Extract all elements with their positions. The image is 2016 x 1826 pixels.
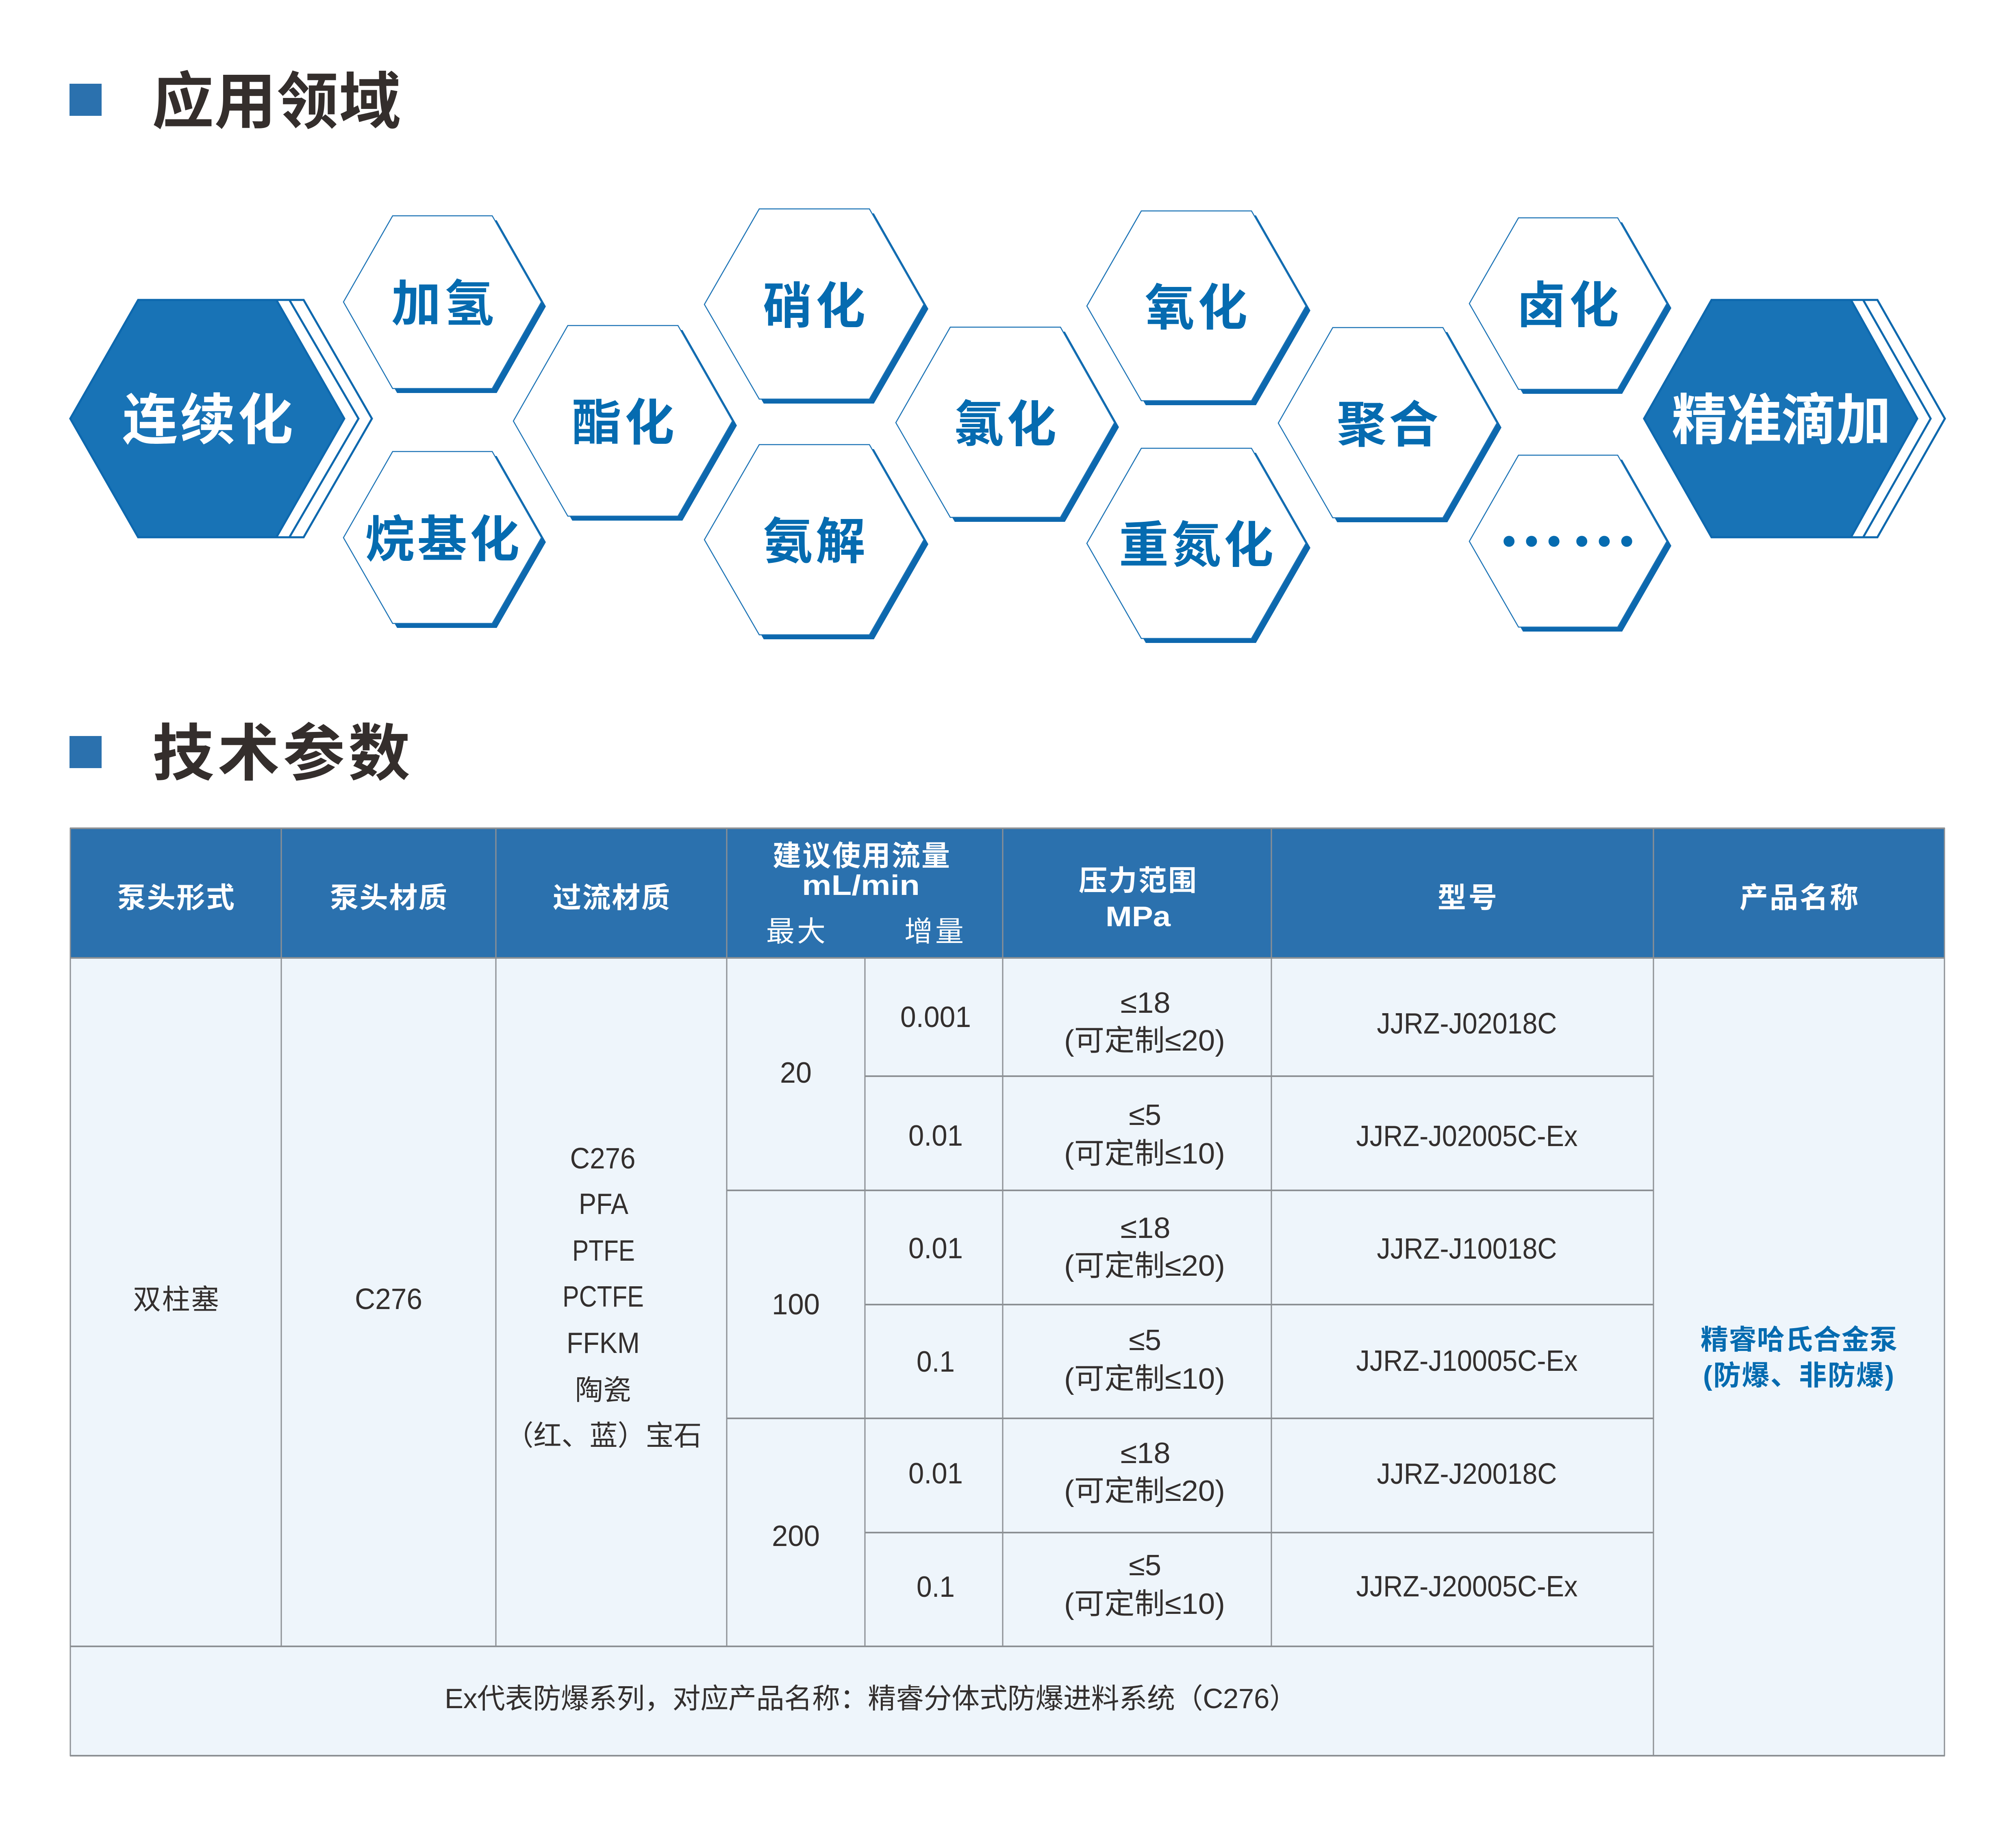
hexagon: alkylation: 烷基化 bbox=[365, 512, 519, 567]
model numbers bbox=[1356, 1007, 1578, 1603]
pressure range values: (可定制≤10) bbox=[1064, 1138, 1225, 1170]
hexagon: oxidation: 氧化 bbox=[1145, 280, 1247, 336]
wetted materials list: C276 bbox=[570, 1142, 636, 1175]
hexagon: chlorination bbox=[896, 327, 1119, 522]
wetted materials list: 陶瓷 bbox=[575, 1374, 631, 1406]
table header row: 过流材质 bbox=[553, 882, 670, 914]
hexagon: continuous flow: 连续化 bbox=[122, 389, 293, 451]
table header row: 建议使用流量 bbox=[773, 840, 950, 872]
model numbers: JJRZ-J02005C-Ex bbox=[1356, 1120, 1578, 1153]
wetted materials list: （红、蓝）宝石 bbox=[506, 1420, 702, 1451]
product name: 精睿哈氏合金泵 bbox=[1701, 1324, 1897, 1355]
flow increment values: 0.1 bbox=[917, 1346, 955, 1378]
pressure range values: (可定制≤20) bbox=[1064, 1025, 1225, 1057]
max flow values bbox=[772, 1057, 820, 1552]
hexagon: chlorination: 氯化 bbox=[954, 397, 1056, 452]
hexagon: halogenation: 卤化 bbox=[1516, 278, 1619, 333]
heading marker square bbox=[70, 736, 102, 768]
hexagon: ellipsis: …… bbox=[1498, 489, 1638, 586]
model numbers: JJRZ-J20005C-Ex bbox=[1356, 1570, 1578, 1603]
hexagon: precise dosing bbox=[1644, 300, 1945, 537]
hexagon: polymerization: 聚合 bbox=[1337, 397, 1438, 453]
table header row: 泵头材质 bbox=[330, 882, 447, 914]
wetted materials list: PCTFE bbox=[563, 1281, 644, 1313]
model numbers: JJRZ-J10005C-Ex bbox=[1356, 1345, 1578, 1377]
flow increment values: 0.001 bbox=[900, 1001, 971, 1034]
table header row: 产品名称 bbox=[1740, 882, 1858, 914]
pressure range values: ≤5 bbox=[1129, 1099, 1161, 1131]
table header row: 压力范围 bbox=[1079, 865, 1197, 897]
product name: (防爆、非防爆) bbox=[1703, 1360, 1894, 1391]
pressure range values: ≤5 bbox=[1129, 1549, 1161, 1582]
pressure range values: ≤18 bbox=[1120, 1212, 1171, 1244]
hexagon: ammonolysis: 氨解 bbox=[763, 514, 865, 569]
table header row: 最大 bbox=[766, 916, 826, 947]
pump head material: C276 bbox=[355, 1283, 422, 1316]
table header row: MPa bbox=[1106, 901, 1171, 932]
flow increment values bbox=[900, 1001, 971, 1603]
max flow values: 100 bbox=[772, 1288, 820, 1321]
max flow values: 200 bbox=[772, 1520, 820, 1552]
hexagon: hydrogenation bbox=[343, 216, 546, 393]
hexagon: precise dosing: 精准滴加 bbox=[1672, 389, 1891, 451]
model numbers: JJRZ-J02018C bbox=[1377, 1007, 1557, 1040]
flow increment values: 0.01 bbox=[908, 1457, 963, 1490]
wetted materials list bbox=[506, 1142, 702, 1451]
hexagon: alkylation bbox=[343, 452, 546, 628]
pressure range values: (可定制≤20) bbox=[1064, 1475, 1225, 1507]
hexagon: nitration: 硝化 bbox=[763, 279, 865, 334]
wetted materials list: PFA bbox=[579, 1188, 628, 1220]
table grid lines bbox=[70, 828, 1945, 1756]
hexagon: ammonolysis bbox=[704, 445, 928, 639]
pressure range values: ≤18 bbox=[1120, 1437, 1171, 1470]
wetted materials list: FFKM bbox=[567, 1327, 640, 1359]
flow increment values: 0.01 bbox=[908, 1120, 963, 1152]
hexagon: nitration bbox=[704, 209, 928, 404]
table header row: 型号 bbox=[1438, 882, 1497, 914]
max flow values: 20 bbox=[780, 1057, 812, 1089]
hexagon: halogenation bbox=[1469, 218, 1671, 394]
technical parameters table bbox=[70, 828, 1945, 1756]
section heading: application fields bbox=[70, 67, 401, 137]
hexagon: esterification bbox=[513, 326, 737, 521]
hexagon: diazotization bbox=[1087, 448, 1310, 643]
hexagon: diazotization: 重氮化 bbox=[1119, 518, 1273, 573]
hexagon: polymerization bbox=[1278, 328, 1501, 522]
hexagon: oxidation bbox=[1087, 211, 1310, 405]
pressure range values bbox=[1064, 987, 1225, 1620]
heading text: 应用领域 bbox=[152, 67, 401, 137]
table header row: 增量 bbox=[904, 916, 964, 947]
pressure range values: (可定制≤10) bbox=[1064, 1588, 1225, 1620]
hexagon: esterification: 酯化 bbox=[572, 395, 674, 451]
flow increment values: 0.01 bbox=[908, 1232, 963, 1265]
pressure range values: ≤18 bbox=[1120, 987, 1171, 1019]
hexagon: hydrogenation: 加氢 bbox=[391, 276, 494, 332]
pressure range values: ≤5 bbox=[1129, 1324, 1161, 1357]
product name bbox=[1701, 1324, 1897, 1391]
pump head type: 双柱塞 bbox=[133, 1284, 219, 1315]
section heading: technical parameters bbox=[70, 719, 410, 788]
hexagon: continuous flow bbox=[70, 300, 372, 537]
panel: application hexagon chain bbox=[70, 209, 1945, 643]
table header row: mL/min bbox=[802, 869, 920, 901]
wetted materials list: PTFE bbox=[572, 1235, 635, 1267]
footnote: Ex代表防爆系列，对应产品名称：精睿分体式防爆进料系统（C276） bbox=[445, 1683, 1297, 1714]
heading text: 技术参数 bbox=[152, 719, 410, 788]
hexagon: ellipsis bbox=[1469, 455, 1671, 632]
model numbers: JJRZ-J20018C bbox=[1377, 1458, 1557, 1490]
table header row: 泵头形式 bbox=[117, 882, 235, 914]
heading marker square bbox=[70, 84, 102, 116]
pressure range values: (可定制≤10) bbox=[1064, 1363, 1225, 1395]
model numbers: JJRZ-J10018C bbox=[1377, 1233, 1557, 1265]
flow increment values: 0.1 bbox=[917, 1571, 955, 1603]
table body background bbox=[70, 958, 1944, 1756]
table header row bbox=[70, 828, 1944, 958]
pressure range values: (可定制≤20) bbox=[1064, 1250, 1225, 1282]
